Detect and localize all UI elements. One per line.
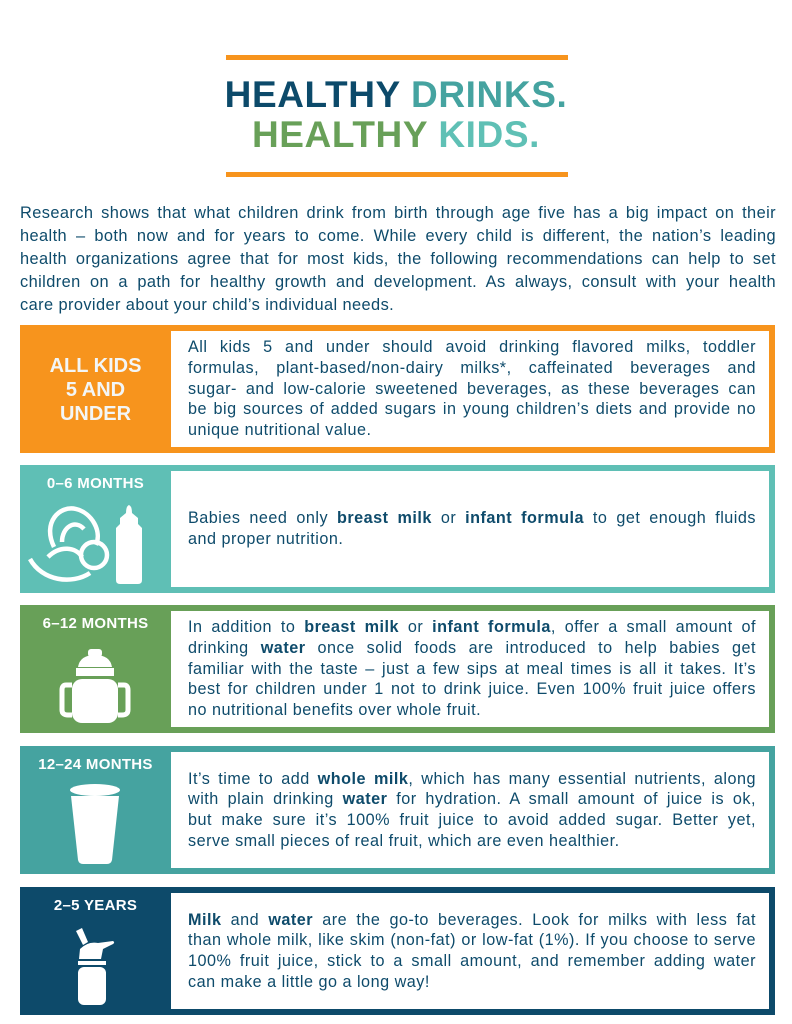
text: 0-6 months [171,471,769,587]
intro text: Research shows that what children drink from birth through age five has a big impact on their [20,204,776,222]
panel: 6-12 months [20,605,775,733]
text: 6-12 months: familiar with the taste – just a few sips at meal times is all it takes. It’s [188,660,756,678]
text: 0-6 months: Babies need only breast milk or infant formula to get enough fluids [188,509,756,527]
text: 6-12 months: In addition to breast milk or infant formula, offer a small amount of [188,618,756,636]
text: all kids: be big sources of added sugars in young children’s diets and provide no [188,400,756,418]
text: 6-12 months [171,611,769,727]
text: 2-5 years: Milk and water are the go-to beverages. Look for milks with less fat [188,911,756,929]
text: 12-24 months: serve small pieces of real fruit, which are even healthier. [188,832,620,850]
label: 0-6 months: 0–6 MONTHS [47,475,144,492]
intro text [20,204,776,314]
text: 2-5 years: 100% fruit juice, stick to a small amount, and remember adding water [188,952,756,970]
text: 2-5 years: than whole milk, like skim (non-fat) or low-fat (1%). If you choose to serve [188,931,756,949]
label: all kids: UNDER [60,403,131,425]
intro text: children on a path for healthy growth and development. As always, consult with your health [20,273,776,291]
intro text: care provider about your child’s individual needs. [20,296,394,314]
panel: 12-24 months [20,746,775,874]
label: 6-12 months: 6–12 MONTHS [43,615,148,632]
text: 12-24 months [171,752,769,868]
title [225,74,567,155]
label: all kids: 5 AND [66,379,125,401]
panel: all kids 5 and under [20,325,775,453]
text: all kids: sugar- and low-calorie sweetened beverages, as these beverages can [188,380,756,398]
title: HEALTHY KIDS. [252,114,540,155]
label: all kids: ALL KIDS [50,355,141,377]
text: 2-5 years: can make a little go a long way! [188,973,430,991]
text: all kids: unique nutritional value. [188,421,372,439]
text: 6-12 months: no nutritional benefits over whole fruit. [188,701,481,719]
label: 2-5 years: 2–5 YEARS [54,897,137,914]
text: all kids [171,331,769,447]
text: 12-24 months: It’s time to add whole milk, which has many essential nutrients, along [188,770,756,788]
text: 12-24 months: with plain drinking water for hydration. A small amount of juice is ok, [188,790,756,808]
text: all kids: formulas, plant-based/non-dairy milks*, caffeinated beverages and [188,359,756,377]
text: 0-6 months: and proper nutrition. [188,530,343,548]
icon: mother and baby with bottle [28,505,142,584]
text: 6-12 months: best for children under 1 not to drink juice. Even 100% fruit juice offers [188,680,756,698]
text: all kids: All kids 5 and under should avoid drinking flavored milks, toddler [188,338,756,356]
icon: sippy cup [60,649,130,723]
icon: water bottle [76,928,114,1005]
text: 2-5 years [171,893,769,1009]
panel: 2-5 years [20,887,775,1015]
text: 6-12 months: drinking water once solid foods are introduced to help babies get [188,639,756,657]
label: 12-24 months: 12–24 MONTHS [38,756,153,773]
panel: 0-6 months [20,465,775,593]
intro text: health – both now and for years to come. While every child is different, the nation’s leading [20,227,776,245]
label: all kids [50,355,141,425]
intro text: health organizations agree that for most kids, the following recommendations can help to set [20,250,776,268]
text: 12-24 months: but make sure it’s 100% fruit juice to avoid added sugar. Better yet, [188,811,756,829]
icon: cup [70,784,120,864]
title: HEALTHY DRINKS. [225,74,567,115]
